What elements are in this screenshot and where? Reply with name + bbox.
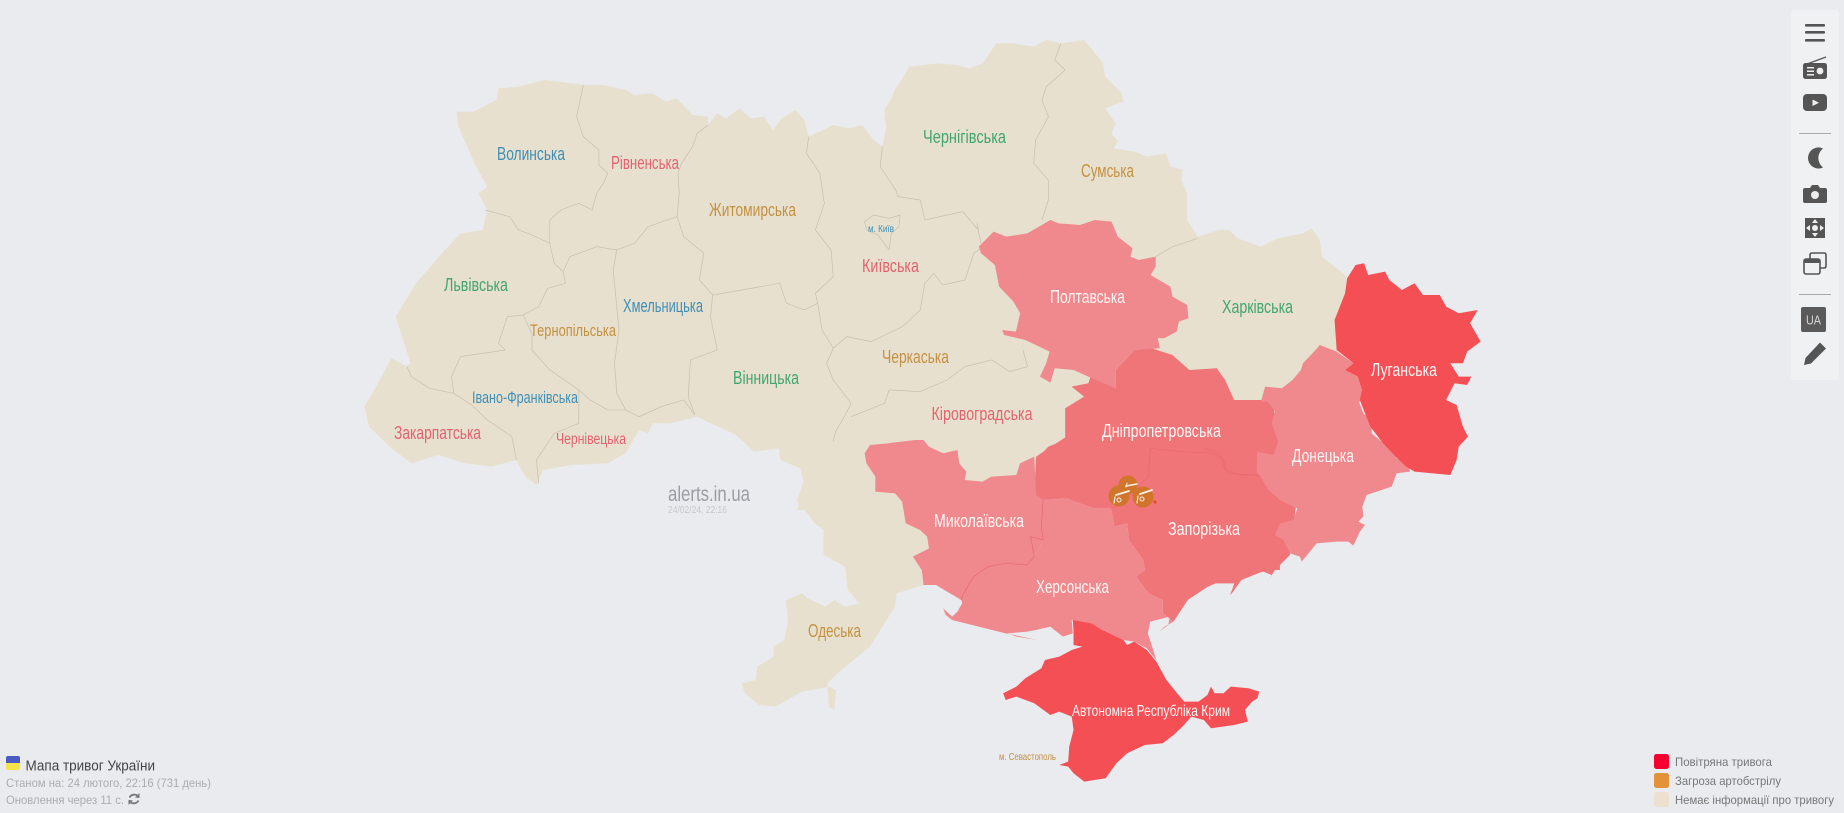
update countdown: Оновлення через 11 с.: [6, 793, 124, 807]
region labels: [394, 127, 1438, 763]
watermark: [668, 483, 750, 516]
region: Odesa oblast: [731, 430, 929, 710]
region: Dnipropetrovsk oblast: [1034, 348, 1297, 622]
oblast borders: north-east: [977, 43, 1198, 257]
map of Ukraine: [365, 40, 1481, 782]
region labels: Тернопільська: [530, 322, 617, 340]
region: Poltava oblast: [979, 220, 1189, 388]
icon: radio: [1803, 57, 1827, 79]
region labels: Закарпатська: [394, 423, 482, 443]
legend item: no information: Немає інформації про тривогу: [1675, 793, 1834, 807]
icon: moon: [1808, 148, 1823, 168]
oblast borders: west and centre: [407, 85, 1027, 483]
toolbar panel: [1791, 10, 1839, 380]
region labels: Сумська: [1081, 161, 1135, 181]
icon: Ukrainian flag: [6, 756, 20, 770]
legend: [1654, 754, 1834, 807]
region labels: Черкаська: [882, 347, 950, 367]
region: Mykolaiv oblast: [865, 440, 1043, 600]
icon: windows: [1804, 253, 1826, 274]
button: language UA: [1801, 307, 1826, 332]
region labels: Донецька: [1292, 446, 1355, 466]
region labels: Одеська: [808, 621, 862, 641]
region fill: northern and eastern beige oblasts: [865, 40, 1347, 480]
region labels: Запорізька: [1168, 519, 1241, 539]
info block bottom left: [6, 756, 211, 807]
region labels: Харківська: [1222, 297, 1294, 317]
region: Crimea: [1003, 620, 1259, 782]
region labels: Дніпропетровська: [1102, 421, 1222, 441]
legend item: artillery threat: Загроза артобстрілу: [1675, 774, 1781, 788]
region: Donetsk oblast: [1257, 345, 1410, 562]
legend item: air alert: Повітряна тривога: [1675, 755, 1772, 769]
watermark: alerts.in.ua: [668, 483, 750, 506]
icon: artillery threat markers: [1108, 476, 1157, 508]
region labels: Луганська: [1371, 360, 1438, 380]
icon: video: [1803, 94, 1827, 111]
region labels: Волинська: [497, 144, 566, 164]
region labels: Вінницька: [733, 368, 800, 388]
status text: Станом на: 24 лютого, 22:16 (731 день): [6, 776, 211, 790]
region labels: Чернівецька: [556, 431, 626, 448]
icon: camera: [1803, 185, 1827, 203]
icon: refresh: [128, 793, 140, 805]
region labels: Київська: [862, 256, 920, 276]
region labels: Івано-Франківська: [472, 389, 579, 407]
border: Dnipropetrovsk and Zaporizhzhia: [1111, 448, 1280, 508]
title: Мапа тривог України: [26, 758, 155, 774]
icon: pencil: [1804, 342, 1826, 365]
region labels: Чернігівська: [923, 127, 1007, 147]
region labels: м. Севастополь: [999, 752, 1056, 763]
region labels: Полтавська: [1050, 287, 1126, 307]
region labels: Автономна Республіка Крим: [1072, 703, 1230, 720]
border: Mykolaiv and Kherson: [961, 500, 1043, 600]
region: Luhansk oblast: [1335, 263, 1481, 475]
region: Kherson oblast: [943, 498, 1174, 660]
watermark: 24/02/24, 22:16: [668, 505, 727, 516]
region labels: Херсонська: [1036, 577, 1110, 597]
region labels: Кіровоградська: [932, 404, 1033, 424]
region labels: Миколаївська: [934, 511, 1025, 531]
region labels: Львівська: [444, 275, 509, 295]
icon: menu: [1805, 24, 1825, 42]
button: language UA: UA: [1806, 312, 1821, 328]
region labels: м. Київ: [868, 223, 894, 235]
region labels: Рівненська: [611, 153, 680, 173]
icon: expand: [1805, 218, 1825, 238]
region labels: Житомирська: [709, 200, 797, 220]
region labels: Хмельницька: [623, 296, 704, 316]
region fill: western and central oblasts: [365, 43, 1040, 510]
